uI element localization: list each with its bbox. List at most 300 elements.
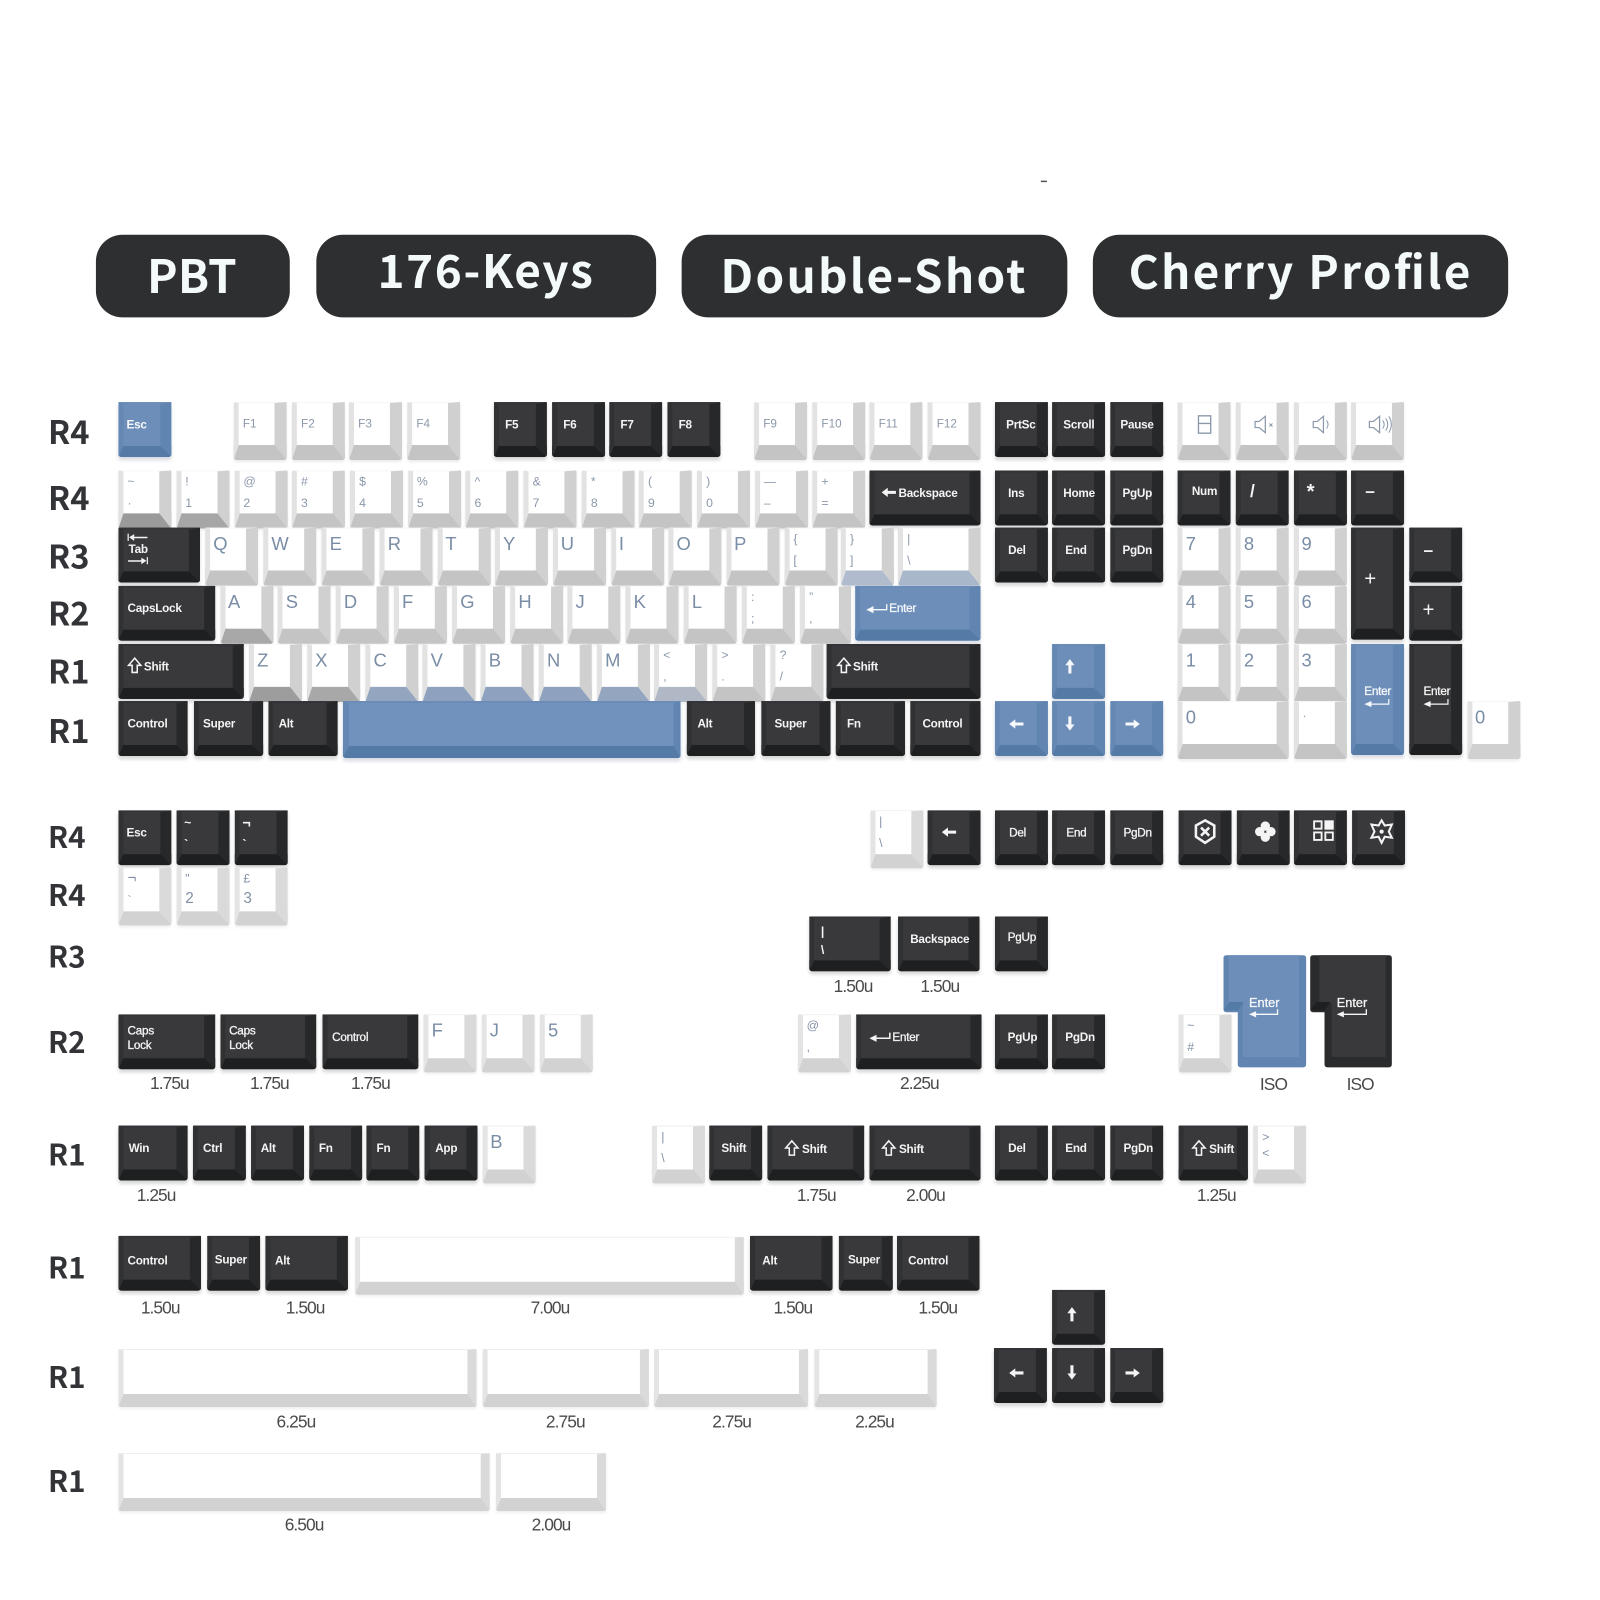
key: Control [118, 1236, 201, 1291]
key: Control: Control [908, 1255, 948, 1267]
size labels: 1.50u [141, 1297, 180, 1317]
key: Esc: Esc [127, 419, 147, 432]
key: O [668, 528, 721, 586]
size labels: 1.50u [286, 1297, 325, 1317]
key: 3: 3 [301, 496, 308, 510]
key: Pause [1110, 402, 1163, 457]
key: 7 [523, 470, 577, 529]
key: Fn: Fn [319, 1143, 333, 1155]
key: Caps Lock: Caps [128, 1026, 154, 1038]
size labels: 6.50u [285, 1515, 324, 1535]
key: F4: F4 [416, 418, 430, 431]
key: Ctrl: Ctrl [203, 1143, 222, 1155]
key: Z: Z [257, 650, 268, 670]
key: num 3 [1293, 644, 1346, 702]
key: Control [897, 1236, 980, 1291]
panel: extra R4 row [117, 810, 1406, 928]
key: num 8 [1236, 528, 1289, 586]
key: Alt [251, 1126, 304, 1181]
key: left bracket: { [793, 532, 797, 546]
key: tall plus: + [1364, 568, 1376, 591]
key: V [422, 644, 476, 702]
key: End: End [1065, 545, 1087, 557]
key: K: K [634, 592, 646, 612]
key: 9: 9 [648, 496, 655, 510]
key: backslash: | [661, 1130, 664, 1144]
key: F5 [494, 402, 547, 457]
key: num 5: 5 [1244, 592, 1254, 612]
key: 9 [639, 470, 692, 529]
key: backslash 1.50u [809, 916, 890, 971]
key: Del: Del [1008, 545, 1026, 557]
key: Shift 1.25u: Shift [1209, 1144, 1234, 1156]
key: greater less: < [1262, 1146, 1269, 1160]
icon key: hexagon [1178, 810, 1231, 865]
key: 5 [540, 1014, 593, 1072]
row labels: R4 [48, 407, 89, 454]
key: App [424, 1126, 477, 1181]
key: slash: / [1250, 482, 1255, 501]
size labels: 1.75u [150, 1073, 189, 1093]
key: tilde hash: # [1187, 1040, 1194, 1054]
key: Y [495, 528, 548, 586]
key: Super: Super [215, 1254, 247, 1266]
key: not dark [234, 810, 287, 865]
key: F7: F7 [620, 419, 634, 432]
key: Fn [836, 701, 905, 756]
panel: blank spacebars row 1 [118, 1349, 937, 1409]
row labels [48, 407, 89, 1501]
key: W: W [271, 534, 289, 554]
icon key: calculator [1178, 402, 1231, 460]
size labels: 1.75u [351, 1073, 390, 1093]
key: Alt: Alt [275, 1255, 290, 1267]
key: Super [839, 1236, 892, 1291]
key: B: B [490, 1132, 503, 1152]
key: alt 0 [1467, 701, 1520, 759]
key: Num [1178, 470, 1231, 526]
key: PrtSc: PrtSc [1006, 419, 1036, 432]
key: F9: F9 [763, 418, 777, 431]
key: num 2: 2 [1244, 650, 1254, 670]
key: 5: 5 [417, 496, 424, 510]
key: F11 [869, 402, 922, 460]
key: blank 2.25u [814, 1349, 937, 1407]
key: Backspace 1.50u: Backspace [910, 934, 969, 946]
size labels: 1.50u [918, 1297, 957, 1317]
key: blue spacebar [342, 701, 680, 758]
key: Control [910, 701, 981, 756]
key: Control [118, 701, 188, 756]
key: left Shift [118, 644, 244, 699]
key: period: > [721, 648, 729, 662]
key: Alt: Alt [697, 718, 712, 731]
key: blank 7u [355, 1237, 744, 1295]
badge: 176-Keys: 176-Keys [378, 236, 593, 302]
size labels: 2.00u [906, 1185, 945, 1205]
key: Q [205, 528, 258, 586]
key: Caps Lock: Lock [229, 1040, 253, 1052]
key: tilde dark [176, 810, 229, 865]
size labels: 1.25u [1197, 1185, 1236, 1205]
key: left bracket [784, 528, 837, 586]
key: F8 [667, 402, 720, 457]
key: 1: ! [185, 474, 189, 489]
key: P: P [734, 534, 746, 554]
key: 4 [350, 470, 403, 529]
key: F3 [349, 402, 402, 460]
key: F1 [234, 402, 287, 460]
key: PgDn [1110, 810, 1163, 865]
key: C [365, 644, 418, 702]
key: right Shift: Shift [853, 661, 878, 673]
key: Super [207, 1236, 260, 1291]
key: Home: Home [1063, 488, 1095, 500]
key: CapsLock [118, 586, 215, 641]
key: 2 quote: 2 [185, 890, 194, 907]
key: 6: ^ [474, 474, 480, 489]
key: Shift 2.00u: Shift [899, 1144, 924, 1156]
key: period: . [721, 669, 725, 684]
key: Alt: Alt [279, 718, 293, 731]
key: X [307, 644, 360, 702]
key: App: App [435, 1143, 457, 1155]
key: X: X [315, 650, 328, 670]
key: Fn: Fn [377, 1143, 390, 1155]
key: question: ? [780, 648, 786, 662]
key: R: R [388, 534, 401, 554]
key: blank 6.25u [118, 1349, 476, 1407]
key: semicolon [742, 586, 795, 644]
key: 4: 4 [359, 496, 366, 510]
key: 9: ( [648, 474, 652, 489]
key: Shift 1.75u: Shift [802, 1144, 827, 1156]
key: L: L [692, 592, 702, 612]
key: blue right arrow [1110, 701, 1163, 756]
key: J: J [490, 1020, 499, 1041]
key: PgDn [1110, 528, 1163, 583]
panel: dark arrow cluster [992, 1290, 1164, 1408]
key: comma: < [663, 648, 670, 662]
key: num 6: 6 [1302, 592, 1312, 612]
panel: extra R1 modifiers row [117, 1126, 1306, 1186]
key: not light [118, 867, 171, 926]
key: PgDn [1052, 1014, 1105, 1069]
row labels: R2 [48, 589, 89, 636]
key: F12 [928, 402, 981, 460]
key: End [1052, 1126, 1105, 1181]
key: Q: Q [213, 534, 228, 554]
key: F [423, 1014, 477, 1072]
key: down arrow [1052, 1348, 1105, 1403]
key: at: , [807, 1040, 810, 1054]
key: 1 [176, 470, 229, 529]
key: num 1: 1 [1186, 650, 1196, 670]
key: I [611, 528, 664, 586]
key: 4: $ [359, 474, 366, 489]
key: P [726, 528, 779, 586]
panel: main keyboard layout [117, 402, 1520, 762]
panel: ISO Enter keys [1224, 955, 1392, 1068]
key: Super: Super [203, 718, 235, 731]
key: Z [249, 644, 302, 702]
key: num 1 [1178, 644, 1231, 702]
key: Super: Super [774, 718, 806, 731]
key: blue ISO Enter [1223, 955, 1306, 1067]
key: alt plus: + [1422, 599, 1434, 621]
key: equals: + [821, 474, 829, 489]
key: Scroll: Scroll [1063, 419, 1094, 432]
key: tilde: ~ [128, 474, 135, 489]
key: dark numpad Enter [1409, 644, 1462, 755]
key: Win: Win [129, 1143, 149, 1155]
row labels: R4 [48, 814, 86, 857]
key: num 7: 7 [1186, 534, 1196, 554]
key: U [553, 528, 606, 586]
key: F8: F8 [679, 419, 692, 432]
key: L [684, 586, 737, 644]
size labels: 2.25u [900, 1073, 939, 1093]
key: Y: Y [503, 534, 515, 554]
key: tall plus [1351, 528, 1404, 640]
key: T: T [445, 534, 457, 554]
key: Alt [265, 1236, 347, 1291]
key: 8 [582, 470, 635, 529]
row labels: R3 [48, 531, 89, 578]
key: F10: F10 [821, 418, 842, 431]
key: U: U [561, 534, 574, 554]
row labels: R1 [48, 706, 89, 753]
key: M [597, 644, 650, 702]
size labels: 1.50u [834, 976, 873, 996]
key: question: / [780, 669, 783, 684]
key: Shift 1.25u [1178, 1126, 1247, 1181]
size labels: 2.75u [546, 1412, 585, 1432]
key: Scroll [1052, 402, 1105, 457]
key: PgUp [994, 916, 1047, 971]
key: Del [995, 810, 1048, 865]
key: PgUp [1110, 470, 1163, 526]
size labels: 2.00u [532, 1515, 571, 1535]
key: End: End [1066, 828, 1086, 840]
key: dark numpad Enter: Enter [1423, 686, 1450, 698]
key: blank 2.75u [654, 1349, 808, 1407]
key: quote: , [809, 611, 813, 626]
key: PrtSc [995, 402, 1048, 457]
key: F12: F12 [937, 418, 957, 431]
key: Ctrl [193, 1126, 246, 1181]
key: 5: % [417, 474, 428, 489]
key: 5 [408, 470, 461, 529]
key: Win [118, 1126, 188, 1181]
key: End [1052, 810, 1105, 865]
key: R [380, 528, 433, 586]
key: comma [654, 644, 707, 702]
key: num period: · [1303, 708, 1307, 722]
key: asterisk: * [1307, 481, 1314, 503]
key: slash [1236, 470, 1289, 526]
key: backslash: \ [661, 1151, 665, 1165]
icon key: volume down [1294, 402, 1347, 460]
key: num 3: 3 [1302, 650, 1312, 670]
key: alt plus [1409, 586, 1462, 641]
key: 5: 5 [548, 1020, 558, 1041]
key: 3 pound: 3 [243, 890, 252, 907]
key: 3 pound [234, 867, 287, 926]
key: backslash: | [907, 532, 910, 546]
key: Esc [118, 810, 171, 865]
key: tilde dark: ~ [184, 815, 191, 830]
key: A: A [228, 592, 240, 612]
key: 2: @ [243, 474, 256, 489]
key: Shift [709, 1126, 762, 1181]
key: backslash 1.50u: | [821, 924, 824, 939]
key: Enter [855, 586, 981, 641]
key: Caps Lock [118, 1014, 215, 1069]
key: K [626, 586, 679, 644]
key: equals [812, 470, 865, 529]
key: PgDn: PgDn [1065, 1032, 1095, 1044]
key: blank 6.50u [118, 1453, 490, 1511]
icon key: clover [1236, 810, 1289, 865]
key: 3 [292, 470, 345, 529]
key: not dark: ` [242, 837, 246, 851]
key: Esc [118, 402, 171, 457]
key: Super [194, 701, 263, 756]
key: D [336, 586, 389, 644]
row labels: R1 [48, 1458, 86, 1501]
key: B [481, 644, 534, 702]
size labels: 1.50u [773, 1297, 813, 1317]
size labels: 1.75u [797, 1185, 836, 1205]
key: A [220, 586, 273, 644]
key: at: @ [807, 1018, 819, 1033]
small mark [1041, 181, 1047, 182]
key: up arrow [1052, 1290, 1105, 1345]
key: tilde hash: ~ [1187, 1018, 1194, 1033]
key: blue ISO Enter: Enter [1249, 995, 1280, 1010]
key: right bracket [841, 528, 894, 586]
key: minus: — [764, 474, 776, 489]
key: num 9 [1293, 528, 1346, 586]
key: 0: 0 [706, 496, 713, 510]
key: backspace arrow [928, 810, 981, 865]
key: B: B [489, 650, 501, 670]
key: N [539, 644, 592, 702]
key: Del [995, 528, 1048, 583]
key: M: M [605, 650, 620, 670]
key: D: D [344, 592, 357, 612]
row labels: R1 [48, 1354, 86, 1397]
key: right bracket: ] [850, 553, 853, 567]
badge: Cherry Profile: Cherry Profile [1129, 237, 1470, 303]
size labels [137, 976, 1374, 1535]
key: Enter 2.25u: Enter [892, 1032, 919, 1044]
key: PgUp: PgUp [1008, 932, 1036, 944]
key: 6: 6 [474, 496, 481, 510]
key: num 2 [1236, 644, 1289, 702]
key: blue down arrow [1052, 701, 1105, 756]
key: num minus [1351, 470, 1404, 526]
key: J [482, 1014, 535, 1072]
key: num 8: 8 [1244, 534, 1254, 554]
key: at [797, 1014, 851, 1072]
key: Num: Num [1192, 486, 1217, 498]
size labels: 2.75u [712, 1412, 751, 1432]
key: tilde hash [1178, 1014, 1231, 1072]
key: Alt [268, 701, 337, 756]
badge: PBT [96, 235, 290, 317]
key: S [278, 586, 331, 644]
size labels: 2.25u [855, 1412, 894, 1432]
key: 7: & [533, 474, 541, 489]
key: End: End [1065, 1143, 1087, 1155]
panel: extra R3 row [808, 916, 1049, 976]
key: dark ISO Enter: Enter [1337, 995, 1368, 1010]
key: num 4: 4 [1186, 592, 1196, 612]
key: Ins [995, 470, 1048, 526]
icon key: volume up [1351, 402, 1404, 460]
badge: Double-Shot [682, 235, 1067, 317]
row labels: R4 [48, 473, 89, 520]
key: Control: Control [128, 718, 167, 731]
key: blue numpad Enter: Enter [1364, 686, 1391, 698]
key: F2 [292, 402, 345, 460]
row labels: R1 [48, 1245, 86, 1288]
key: E [321, 528, 374, 586]
panel: blank spacebars row 2 [118, 1453, 606, 1513]
key: blue numpad Enter [1351, 644, 1404, 755]
key: PgDn: PgDn [1122, 545, 1152, 557]
key: num minus: – [1365, 482, 1375, 501]
key: question [770, 644, 823, 702]
key: G [452, 586, 505, 644]
key: Alt [750, 1236, 833, 1291]
key: I: I [619, 534, 624, 554]
key: right Shift [827, 644, 981, 699]
key: 8: 8 [591, 496, 598, 510]
badge: Cherry Profile [1093, 235, 1508, 317]
key: Del [995, 1126, 1048, 1181]
size labels: 1.50u [920, 976, 959, 996]
key: PgUp: PgUp [1008, 1032, 1037, 1044]
key: Fn: Fn [847, 718, 861, 731]
key: Tab: Tab [129, 543, 148, 556]
key: Del: Del [1008, 1143, 1026, 1155]
key: E: E [330, 534, 342, 554]
size labels: ISO [1260, 1074, 1287, 1094]
key: F10 [812, 402, 865, 460]
key: S: S [286, 592, 298, 612]
key: not dark: ¬ [242, 814, 250, 831]
icon key: mute [1236, 402, 1289, 460]
key: wide 0: 0 [1186, 707, 1196, 728]
key: minus: – [764, 496, 771, 510]
key: right bracket: } [850, 532, 854, 546]
key: F: F [402, 592, 413, 612]
key: Backspace 1.50u [898, 916, 980, 971]
key: num 5 [1236, 586, 1289, 644]
key: backslash: | [879, 814, 882, 829]
size labels: 1.25u [137, 1185, 176, 1205]
key: num 9: 9 [1302, 534, 1312, 554]
key: Ins: Ins [1008, 488, 1024, 500]
key: Del: Del [1009, 828, 1026, 840]
key: 2 quote [176, 867, 229, 926]
key: Shift: Shift [721, 1143, 746, 1155]
key: quote: ” [809, 590, 813, 604]
key: blue up arrow [1052, 644, 1105, 699]
